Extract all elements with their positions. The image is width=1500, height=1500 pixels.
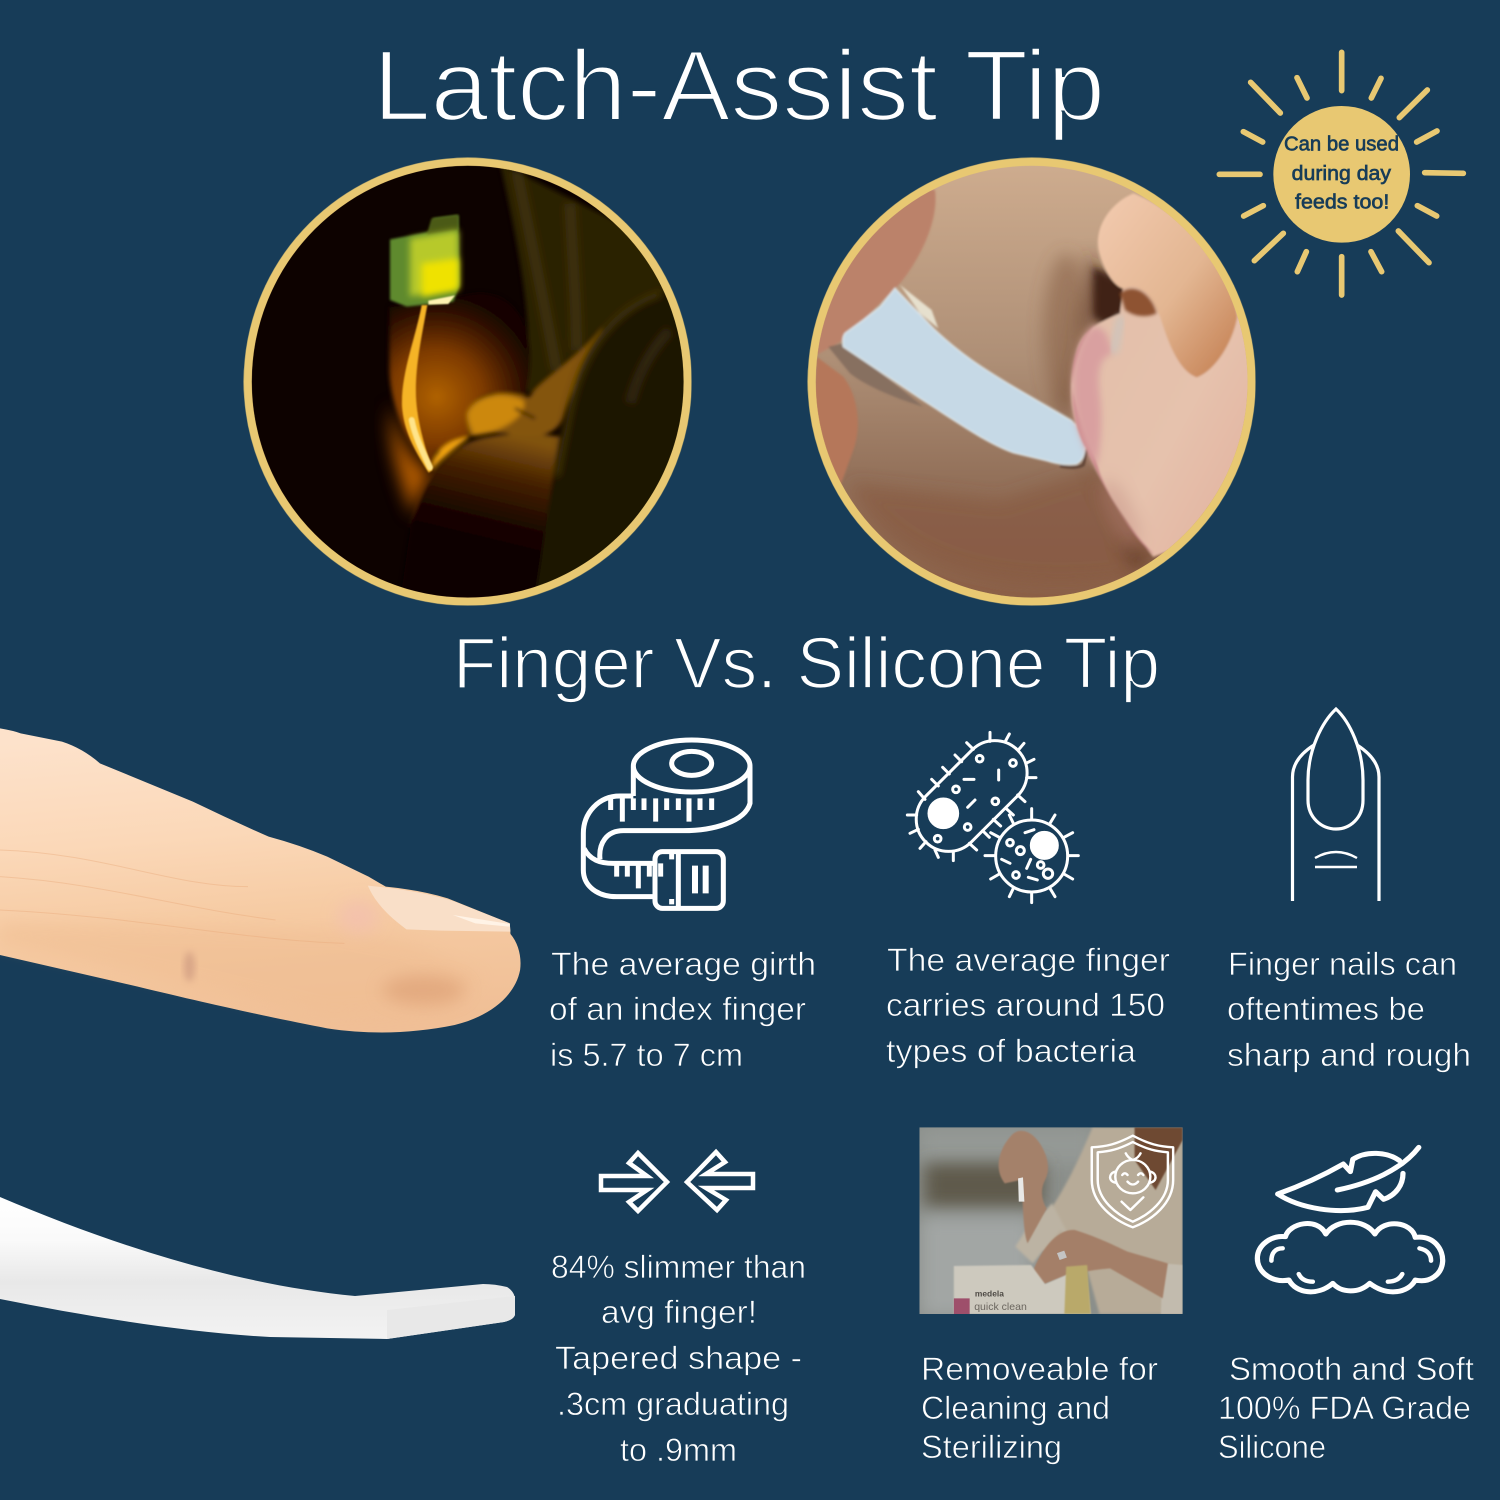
text: finger nails: sharp and rough xyxy=(1227,1037,1471,1073)
silicone tip xyxy=(843,288,1085,465)
text: slimmer tapered shape: Tapered shape - xyxy=(555,1340,802,1376)
text: slimmer tapered shape: .3cm graduating xyxy=(557,1386,789,1422)
text: cleaning: Removeable for xyxy=(921,1351,1158,1387)
icon: feather and cloud xyxy=(1257,1147,1443,1292)
baby nose and forehead xyxy=(466,327,603,437)
green light block xyxy=(390,215,459,307)
tube highlight xyxy=(900,285,938,328)
glowing tube xyxy=(402,305,432,473)
text: average girth xyxy=(549,946,816,1073)
icon: bacteria xyxy=(903,727,1078,903)
text: smooth and soft: Silicone xyxy=(1218,1429,1326,1465)
baby body xyxy=(400,434,560,598)
tip held xyxy=(1018,1177,1024,1202)
text: average girth: The average girth xyxy=(551,946,816,982)
text: average girth: of an index finger xyxy=(549,991,806,1027)
left glow xyxy=(389,403,432,517)
sun disc xyxy=(1273,106,1410,243)
text: slimmer tapered shape: to .9mm xyxy=(620,1432,737,1468)
dark shadow xyxy=(856,466,1149,570)
sun text xyxy=(1284,133,1399,214)
nose xyxy=(1098,193,1237,377)
text: average girth: is 5.7 to 7 cm xyxy=(550,1037,743,1073)
cloud xyxy=(1257,1222,1443,1292)
icon: tape measure xyxy=(583,740,750,908)
icon: fingernail xyxy=(1292,709,1379,901)
fingernail xyxy=(368,886,510,932)
text: cleaning: Sterilizing xyxy=(921,1429,1062,1465)
baby lip xyxy=(432,437,470,470)
feather xyxy=(1278,1147,1419,1211)
lip xyxy=(1073,325,1155,555)
chest xyxy=(389,293,530,470)
text: smooth and soft: 100% FDA Grade xyxy=(1218,1390,1471,1426)
text: bacteria: types of bacteria xyxy=(886,1033,1136,1069)
text: bacteria: The average finger xyxy=(887,942,1170,978)
grey tip shadow xyxy=(828,343,923,407)
baby cheek xyxy=(1070,286,1248,558)
nostril shadow xyxy=(1093,267,1130,327)
text: smooth and soft xyxy=(1218,1351,1474,1465)
icon: slimmer arrows xyxy=(601,1152,753,1211)
text: bacteria: carries around 150 xyxy=(886,987,1165,1023)
shield with baby icon xyxy=(1092,1136,1173,1227)
sleeve xyxy=(1016,1203,1065,1264)
text: slimmer tapered shape xyxy=(551,1249,806,1468)
curtain xyxy=(500,163,673,393)
text: finger nails xyxy=(1227,946,1471,1073)
photo: index finger xyxy=(0,728,521,1032)
subtitle: Finger Vs. Silicone Tip xyxy=(453,624,1160,704)
photo: removing tip for cleaning with shield icon: medela xyxy=(975,1290,1004,1299)
text: finger nails: oftentimes be xyxy=(1227,991,1425,1027)
lower hand xyxy=(1031,1230,1168,1298)
photo: silicone tip at baby's mouth xyxy=(800,150,1267,617)
sun rays xyxy=(1219,52,1463,295)
text: slimmer tapered shape: 84% slimmer than xyxy=(551,1249,806,1285)
photo: glowing latch-assist tip at night xyxy=(240,150,707,617)
packet xyxy=(954,1265,1091,1314)
sun text: feeds too! xyxy=(1295,191,1389,214)
title: Latch-Assist Tip xyxy=(373,30,1105,142)
text: slimmer tapered shape: avg finger! xyxy=(601,1294,757,1330)
arm xyxy=(535,292,688,598)
raised hand xyxy=(999,1131,1048,1243)
photo: removing tip for cleaning with shield icon xyxy=(919,1127,1183,1317)
gum highlight xyxy=(1113,317,1122,353)
sun text: Can be used xyxy=(1284,133,1399,156)
text: cleaning xyxy=(921,1351,1158,1465)
sun text: during day xyxy=(1292,162,1392,185)
text: bacteria xyxy=(886,942,1170,1069)
text: cleaning: Cleaning and xyxy=(921,1390,1110,1426)
photo: removing tip for cleaning with shield icon: quick clean xyxy=(974,1302,1027,1313)
text: finger nails: Finger nails can xyxy=(1228,946,1457,982)
text: smooth and soft: Smooth and Soft xyxy=(1229,1351,1474,1387)
mother's finger xyxy=(818,190,936,354)
robe xyxy=(1044,1127,1183,1314)
sun badge xyxy=(1219,52,1463,295)
photo: silicone tip xyxy=(0,1197,515,1339)
